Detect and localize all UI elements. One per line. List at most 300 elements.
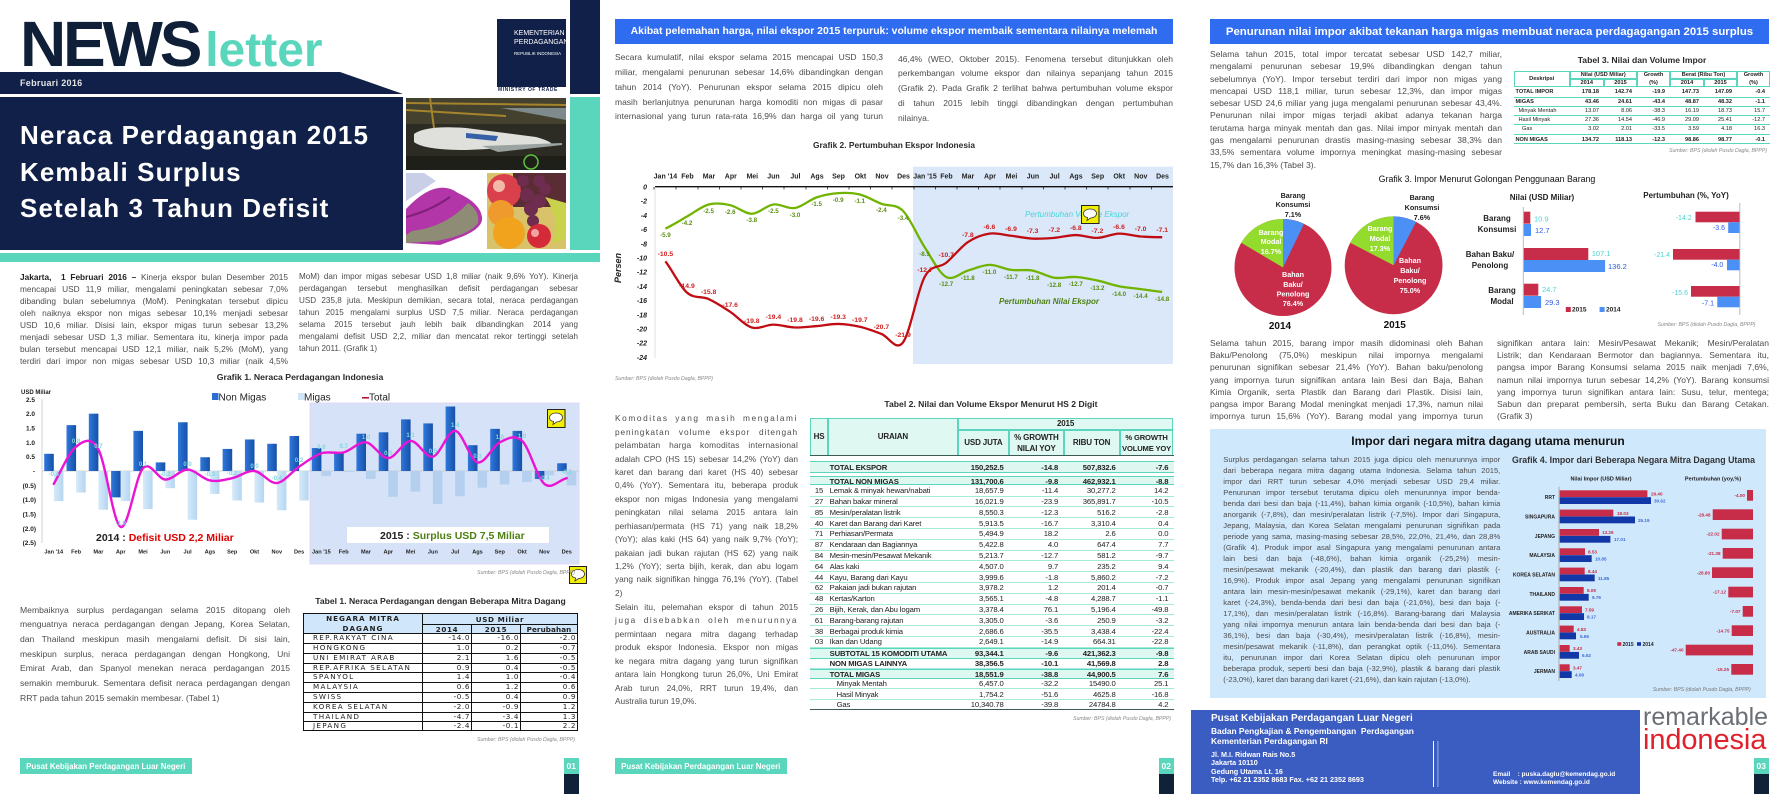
table: Tabel 3: 2015 [1714, 80, 1727, 86]
table: Tabel 3: 134.72 [1582, 137, 1599, 143]
table: Tabel 3: -43.4 [1652, 99, 1665, 105]
table: Tabel 2: -8.8 [1156, 477, 1168, 486]
publisher name: Pusat Kebijakan Perdagangan Luar Negeri [1211, 713, 1413, 724]
month labels: Mei [746, 174, 758, 180]
table: Tabel 2: 25.1 [1154, 679, 1168, 688]
table: Tabel 2: URAIAN [878, 432, 908, 441]
value labels red: -6.6 [1113, 224, 1125, 231]
table: Tabel 2: 1.2 [1048, 583, 1058, 592]
table: Tabel 3: -1.1 [1755, 99, 1765, 105]
month labels: Feb [940, 174, 953, 180]
table: Tabel 3: -0.4 [1755, 89, 1765, 95]
table: Tabel 2: Perhiasan/Permata [830, 529, 893, 538]
table: Tabel 3: 24.61 [1618, 99, 1632, 105]
table: Tabel 2: 3,310.4 [1091, 519, 1116, 528]
footer label page 1: Pusat Kebijakan Perdagangan Luar Negeri [26, 762, 185, 770]
bar chart: value: 29.3 [1545, 298, 1560, 307]
total data labels: 0.3 [473, 454, 482, 460]
month labels: Ags [205, 550, 215, 556]
growth values: -4.00 [1735, 493, 1745, 498]
y axis labels: -20 [637, 326, 647, 334]
text: commodity left column: Komoditas yang masih mengalami [615, 413, 798, 423]
y axis labels: -24 [637, 355, 647, 362]
table: Tabel 2: 462,932.1 [1083, 477, 1116, 486]
table: Tabel 1: 1.6 [506, 653, 519, 662]
pie chart 2014: 7.1% [1285, 210, 1302, 219]
country names [1509, 495, 1556, 675]
total data labels: 1.0 [362, 435, 371, 441]
text: import overview: sebesar USD 24,6 miliar yang juga mengalami penurunan sebesar 43,4%. [1210, 98, 1502, 108]
lead text right column: tahun 2015 mengalami surplus USD 7,5 miliar. Neraca perdagangan [299, 308, 578, 317]
table: Tabel 2: Alas kaki [830, 562, 859, 571]
brand logo: remarkable indonesia: remarkable [1643, 703, 1768, 731]
table: Tabel 3: MIGAS [1516, 99, 1534, 105]
bar chart: value: Nilai (USD Miliar) [1510, 193, 1575, 202]
ministry logo: PERDAGANGAN [514, 39, 567, 46]
country names: KOREA SELATAN [1513, 572, 1555, 578]
heading: Tabel 3: Tabel 3. Nilai dan Volume Impor [1578, 55, 1706, 65]
pie chart 2014: Barang [1259, 228, 1283, 237]
legend [212, 392, 390, 404]
table: Tabel 2: 507,832.6 [1083, 463, 1116, 472]
table: Tabel 2: 27 [815, 497, 823, 506]
text: export left column: Secara kumulatif, nilai ekspor selama 2015 mencapai USD 150,3 [615, 52, 883, 62]
table: Tabel 2: 4.2 [1158, 700, 1168, 709]
month labels: Jan '14 [654, 174, 677, 180]
growth values: -21.38 [1707, 551, 1721, 556]
value labels green: -11.0 [983, 269, 997, 276]
text: partner demand: ke negara mitra dagang yang turun signifikan [615, 656, 798, 666]
table: Tabel 2: 03 [815, 637, 823, 646]
month labels: Sep [1091, 174, 1104, 180]
text: import by use right column: namun nilai impornya turun sebesar 14,2% (YoY). Barang konsumsi [1497, 375, 1769, 385]
divider [1433, 741, 1434, 787]
text: export right column: 46,4% (WEO, Oktober 2015). Fenomena tersebut ditunjukkan oleh [898, 54, 1173, 64]
table: Tabel 2: % GROWTH [1014, 433, 1059, 442]
total data labels: -0.3 [160, 472, 171, 478]
text: export left column: tahun 2014 (YoY). Penurunan ekspor selama 2015 dipicu oleh [615, 82, 883, 92]
bar values: 4.83 [1577, 627, 1586, 632]
table: Tabel 2 [810, 418, 1174, 710]
chart: Grafik 4 imports by partner: 30.62 [1654, 498, 1666, 504]
value labels green: -4.2 [682, 220, 693, 227]
total data labels: -0.2 [227, 471, 238, 477]
table: Tabel 1: -0.9 [503, 702, 519, 711]
month labels: Jun [1027, 174, 1039, 180]
ministry logo: KEMENTERIAN [514, 30, 565, 37]
total data labels: 1.1 [406, 433, 415, 439]
table: Tabel 2: 40 [815, 519, 823, 528]
panel text: (-23,0%), karet dan barang dari karet (-21,6%), dan kain rajutan (-13,0%). [1223, 674, 1471, 684]
value labels red: -7.2 [1092, 228, 1103, 235]
table: Tabel 2: -9.8 [1156, 649, 1168, 658]
table: Tabel 3: 25.41 [1718, 117, 1732, 123]
table: Tabel 3: 29.09 [1685, 117, 1699, 123]
chart: Grafik 3 import by use [1234, 191, 1740, 332]
title panel: Kembali Surplus [20, 157, 242, 187]
table: Tabel 1: 1.4 [457, 672, 470, 681]
bar chart: value: 136.2 [1608, 262, 1627, 271]
table: Tabel 3: 178.18 [1582, 89, 1599, 95]
table: Tabel 3: Nilai (USD Miliar) [1581, 72, 1626, 78]
table: Tabel 2: 5,494.9 [979, 529, 1004, 538]
pie chart 2014: Baku/ [1283, 280, 1303, 289]
country names: MALAYSIA [1529, 553, 1555, 559]
lead text right column: tahun 2011. (Grafik 1) [299, 344, 377, 353]
chart: Grafik 4 imports by partner: 11.85 [1598, 576, 1610, 581]
value series green [665, 193, 1162, 292]
month labels: Des [294, 550, 304, 556]
table: Tabel 2: 4.0 [1048, 540, 1058, 549]
table: Tabel 3: 43.46 [1585, 99, 1599, 105]
heading: Tabel 1: Tabel 1. Neraca Perdagangan dengan Beberapa Mitra Dagang [315, 596, 566, 606]
month labels: Apr [984, 174, 996, 180]
table: Tabel 1: JEPANG [313, 721, 347, 730]
value labels red: -10.7 [938, 252, 954, 259]
icon: comment note [548, 410, 565, 428]
panel text: periode yang sama, masing-masing sebesar 28,5%, 22,0%, 21,4%, dan 28,8% [1223, 532, 1500, 540]
lead text left column: mencapai USD 11,9 miliar, mengalami peningkatan sebesar 7,0% [20, 284, 288, 294]
bar chart: value: 12.7 [1535, 226, 1550, 235]
table: Tabel 2: 3,999.6 [979, 573, 1004, 582]
month labels: Sep [832, 174, 845, 180]
heading: Grafik 3: Grafik 3. Impor Menurut Golongan Penggunaan Barang [1379, 174, 1595, 184]
country names: THAILAND [1529, 592, 1555, 598]
annotation 2015 surplus: 2015 : Surplus USD 7,5 Miliar [380, 530, 525, 542]
publisher unit: Badan Pengkajian & Pengembangan Perdagangan [1211, 726, 1414, 736]
text: surplus analysis: Emirat Arab, dan Spanyol menekan neraca perdagangan 2015 [20, 663, 290, 673]
y axis title: Persen [613, 252, 623, 283]
bar chart: value [1466, 193, 1627, 315]
bar values [1573, 492, 1663, 670]
table: Tabel 2: 48 [815, 594, 823, 603]
table: Tabel 2: 1,754.2 [979, 690, 1004, 699]
panel text: impor dari RRT turun sebesar 4,0% menjadi sebesar USD 29,4 miliar. [1223, 476, 1500, 486]
pie chart 2014: Konsumsi [1276, 200, 1310, 209]
table: Tabel 2: 131,700.6 [971, 477, 1004, 486]
table: Tabel 2: 365,891.7 [1083, 497, 1116, 506]
value labels red: -19.3 [830, 314, 846, 321]
month labels: Ags [810, 174, 824, 180]
text: import by use right column: Sabun dan preparat pembersih, serta Buku dan Barang Cetakan. [1497, 399, 1769, 409]
table: Tabel 2: 4,288.7 [1091, 594, 1116, 603]
table: Tabel 2: 5,422.8 [979, 540, 1004, 549]
value labels green: -0.9 [833, 197, 844, 204]
value labels green: -12.7 [939, 281, 954, 288]
country names: JERMAN [1534, 669, 1555, 675]
table: Tabel 2: Minyak Mentah [837, 679, 887, 688]
month labels: Apr [116, 550, 126, 556]
bar chart: value: Barang [1483, 214, 1511, 223]
bar values: 13.26 [1602, 530, 1614, 535]
heading: export section: Akibat pelemahan harga, nilai ekspor 2015 terpuruk: volume ekspor membaik sementara nilainya melemah [631, 26, 1157, 37]
table: Tabel 2: Berbagai produk kimia [830, 627, 903, 636]
y axis labels: (2.5) [23, 540, 36, 547]
text: import by use left column: penurunan signifikan sebesar 21,4% (YoY). Bahan baku/penolong [1210, 362, 1483, 372]
growth values: -14.75 [1716, 628, 1730, 633]
source note Grafik 1: Sumber: BPS (diolah Pusdo Dagla, BPPP) [477, 570, 575, 576]
total data labels: -0.2 [562, 470, 573, 476]
table: Tabel 1: -2.0 [454, 702, 470, 711]
text: export right column: nilainya. [898, 113, 929, 123]
table: Tabel 2: 250.9 [1097, 616, 1116, 625]
value labels red: -12.7 [917, 267, 933, 274]
photo: fresh fruit [487, 173, 566, 249]
table: Tabel 3: 147.73 [1682, 89, 1699, 95]
table: Tabel 1: -16.0 [497, 633, 519, 642]
value labels red [658, 224, 1168, 339]
table: Tabel 2: -11.4 [1042, 486, 1058, 495]
table: Tabel 3: Growth [1744, 72, 1763, 78]
total data labels: 1.0 [496, 435, 505, 441]
address [1211, 750, 1364, 784]
panel text: 17,1%), dan mesin/peralatan listrik (-16,8%). Barang-barang dari Malaysia [1223, 608, 1500, 618]
table: Tabel 2: 4,507.0 [979, 562, 1004, 571]
lead text left column: bulan tersebut mencapai USD 12,1 miliar, naik 5,2% (MoM), yang [20, 344, 288, 354]
text: commodity left column: adalah CPO (HS 15) sebesar 14,2% (YoY) dan [615, 454, 798, 464]
value labels red: -20.7 [874, 324, 889, 331]
ministry logo [497, 19, 567, 93]
chart: Grafik 4 imports by partner: 6.52 [1582, 653, 1591, 658]
table: Tabel 2: -35.5 [1041, 627, 1058, 636]
text: import overview: mengalami penurunan sebesar 19,9% dibandingkan dengan tahun [1210, 61, 1502, 71]
table: Tabel 2: TOTAL NON MIGAS [830, 477, 899, 486]
table: Tabel 1: -3.4 [503, 712, 519, 721]
table: Tabel 3: 13.07 [1585, 108, 1599, 114]
panel text: Surplus perdagangan selama tahun 2015 juga dipicu oleh menurunnya impor [1223, 454, 1500, 464]
text: partner demand: Australia turun 19,0%. [615, 696, 697, 706]
bar chart: growth: -4.0 [1711, 262, 1723, 269]
month labels: Mar [962, 174, 974, 180]
month labels: Sep [495, 550, 506, 556]
panel text: mesin/pesawat mekanik (-20,4%), dan plastik dan barang dari plastik (- [1223, 564, 1500, 574]
table: Tabel 2: Kertas/Karton [830, 594, 875, 603]
table: Tabel 1: -2.4 [454, 721, 470, 730]
right stripe teal [570, 97, 600, 250]
table: Tabel 2: -10.1 [1041, 659, 1058, 668]
table: Tabel 1: -0.5 [560, 663, 576, 672]
table: Tabel 1: 2014 [436, 625, 458, 634]
total data labels: -0.4 [49, 472, 60, 478]
month labels: Okt [1113, 174, 1126, 180]
table: Tabel 3: TOTAL IMPOR [1516, 89, 1553, 95]
month labels: Jul [184, 550, 192, 556]
month labels: Des [562, 550, 572, 556]
growth values [1670, 493, 1745, 672]
panel text: Jepang, Malaysia, dan Korea Selatan mengalami penurunan signifikan pada [1223, 520, 1500, 530]
table: Tabel 3: -33.5 [1652, 126, 1665, 132]
y axis labels: -6 [641, 227, 647, 234]
country names: SINGAPURA [1525, 514, 1555, 520]
month labels [44, 550, 572, 556]
text: commodity left column: (YoY); alas kaki (HS 64) yang naik 9,7% (YoY); [615, 534, 798, 544]
table: Tabel 2: 664.31 [1093, 637, 1116, 646]
table: Tabel 3: 2014 [1681, 80, 1693, 86]
table: Tabel 2: 2.6 [1105, 529, 1116, 538]
pie chart 2015: Bahan [1399, 256, 1421, 265]
y axis labels: 0 [643, 184, 647, 192]
value labels red: -17.6 [722, 302, 738, 309]
country names: RRT [1545, 495, 1555, 501]
table: Tabel 2: -4.8 [1045, 594, 1058, 603]
table: Tabel 2: 85 [815, 508, 823, 517]
table: Tabel 2: 44,900.5 [1087, 670, 1116, 679]
table: Tabel 1: 0.2 [506, 643, 519, 652]
text: import by use right column [1497, 338, 1769, 421]
table: Tabel 3: Deskripsi [1529, 76, 1554, 82]
pie chart 2015: 2015 [1384, 320, 1406, 331]
source note Tabel 1: Sumber: BPS (diolah Pusdo Dagla, BPPP) [477, 736, 575, 742]
non migas bars [44, 406, 567, 497]
value labels red: -19.6 [809, 316, 825, 323]
bar chart: growth: -21.4 [1654, 252, 1670, 259]
table: Tabel 2: 2,649.1 [979, 637, 1004, 646]
value labels green: -8.5 [919, 251, 930, 258]
pie chart 2015: 7.6% [1414, 213, 1431, 222]
text: commodity left column: ekspor non migas Indonesia yang mengalami [615, 494, 798, 504]
text: import overview: 33,5% sementara volume impornya meningkat masing-masing sebesar [1210, 147, 1502, 157]
text: commodity left column: perhiasan/permata (HS 71) yang naik 18,2% [615, 521, 798, 531]
panel text: yang nilai impornya menurun antara lain benda-benda dari besi dan baja (- [1223, 620, 1500, 628]
table: Tabel 2: 2,686.6 [979, 627, 1004, 636]
heading: Grafik 2: Grafik 2. Pertumbuhan Ekspor Indonesia [813, 140, 975, 150]
growth values: -28.80 [1697, 570, 1710, 575]
footer label page 2: Pusat Kebijakan Perdagangan Luar Negeri [621, 762, 780, 770]
y axis labels: 2.0 [26, 411, 35, 418]
text: export right column [898, 54, 1173, 123]
value labels red: -7.8 [962, 232, 974, 239]
2015 shaded panel [913, 167, 1173, 364]
month labels: Ags [1069, 174, 1083, 180]
table: Tabel 3: 118.13 [1615, 137, 1632, 143]
text: export left column: masih berlanjutnya penurunan harga komoditi non migas di pasar [615, 97, 883, 107]
chart: Grafik 1 trade balance [21, 390, 580, 564]
text: surplus analysis: semakin memburuk. Sementara defisit neraca perdagangan dengan [20, 678, 290, 688]
table: Tabel 1: -14.0 [448, 633, 470, 642]
table: Tabel 2: 93,344.1 [975, 649, 1004, 658]
total data labels: -0.4 [539, 476, 550, 482]
table: Tabel 2: 62 [815, 583, 823, 592]
pie chart 2014: Bahan [1282, 270, 1304, 279]
table: Tabel 1: 1.0 [457, 643, 470, 652]
value labels red: -19.8 [787, 317, 803, 324]
month labels: Apr [383, 550, 394, 556]
month labels: Mar [703, 174, 715, 180]
bar chart: value: 2014 [1606, 307, 1621, 314]
pie chart 2015 [1345, 193, 1442, 331]
bar chart: growth: -3.6 [1713, 225, 1725, 232]
panel text: antara lain mesin-mesin/pesawat mekanik (-29,1%), karet dan barang dari [1223, 586, 1500, 596]
y axis labels: -2 [641, 199, 647, 206]
table: Tabel 2: Kendaraan dan Bagiannya [830, 540, 917, 549]
table: Tabel 2: RIBU TON [1073, 438, 1110, 447]
text: import overview: terutama harga minyak mentah dan gas. Nilai impor minyak mentah dan [1210, 123, 1502, 133]
table: Tabel 3: 98.86 [1685, 137, 1699, 143]
table: Tabel 2: 235.2 [1097, 562, 1116, 571]
heading: Grafik 1: Grafik 1. Neraca Perdagangan Indonesia [217, 372, 383, 382]
table: Tabel 3: 3.59 [1688, 126, 1699, 132]
value labels red: -6.9 [1005, 226, 1017, 233]
month labels: Feb [681, 174, 694, 180]
panel: imports from trade partners [1210, 429, 1766, 698]
bar chart: growth: Pertumbuhan (%, YoY) [1643, 191, 1729, 200]
country names: ARAB SAUDI [1524, 650, 1556, 656]
table: Tabel 3: 27.36 [1585, 117, 1599, 123]
axis lines [42, 399, 579, 543]
value labels red: -19.8 [744, 318, 760, 325]
table: Tabel 2: -0.7 [1156, 583, 1168, 592]
month labels: Okt [517, 550, 527, 556]
legend: Total [369, 392, 390, 404]
table: Tabel 2: Barang-barang rajutan [830, 616, 903, 625]
value labels red: -10.5 [658, 251, 673, 258]
total data labels: -0.3 [205, 472, 216, 478]
table: Tabel 2: 38 [815, 627, 823, 636]
text: import by use right column: Listrik; dan Kendaraan Bermotor dan bagiannya. Sementara itu, [1497, 350, 1769, 360]
pie chart 2015: Baku/ [1400, 266, 1420, 275]
source note Tabel 2: Sumber: BPS (diolah Pusdo Dagla, BPPP) [1073, 716, 1171, 722]
masthead title: NEWSletter: NEWSletter [20, 8, 323, 80]
table: Tabel 2: -10.5 [1152, 497, 1168, 506]
table: Tabel 2: 3,565.1 [979, 594, 1004, 603]
y axis labels: 1.5 [26, 426, 35, 432]
address: Telp. +62 21 2352 8683 Fax. +62 21 2352 8693 [1211, 775, 1364, 784]
text: partner demand: juga disebabkan oleh menurunnya [615, 615, 798, 625]
table: Tabel 1: -2.0 [560, 633, 576, 642]
table: Tabel 2: 421,362.3 [1083, 649, 1116, 658]
table: Tabel 1: 0.6 [457, 682, 470, 691]
pie chart 2014: 16.7% [1261, 247, 1282, 256]
value labels red: -19.7 [852, 317, 868, 324]
total line [54, 431, 567, 527]
month labels: Nov [1134, 174, 1148, 180]
value labels green: -3.8 [746, 217, 758, 224]
month labels: Nov [875, 174, 889, 180]
table: Tabel 2: 6,457.0 [979, 679, 1004, 688]
heading: Tabel 2: Tabel 2. Nilai dan Volume Ekspor Menurut HS 2 Digit [884, 399, 1098, 409]
text: export left column: miliar, mengalami penurunan sebesar 14,6% dibandingkan dengan [615, 67, 883, 77]
table: Tabel 2: 24784.8 [1089, 700, 1116, 709]
table: Tabel 2: -9.8 [1045, 477, 1058, 486]
table: Tabel 3: Berat (Ribu Ton) [1682, 72, 1725, 78]
date band: Februari 2016 [20, 78, 82, 88]
table: Tabel 2: 44 [815, 573, 823, 582]
bar values: 8.44 [1588, 569, 1597, 574]
value labels green: -3.0 [790, 212, 801, 219]
growth values: -28.48 [1697, 512, 1711, 517]
month labels: Jun [160, 550, 171, 556]
page number 03: 03 [1757, 761, 1766, 771]
panel text: (Grafik 4). Produk impor asal Singapura yang mengalami penurunan antara [1223, 542, 1500, 552]
table: Tabel 2: 201.4 [1097, 583, 1116, 592]
bar values: 18.03 [1617, 511, 1629, 516]
table: Tabel 1: THAILAND [313, 712, 360, 721]
text: commodity left column: peningkatan volume ekspor ditengah [615, 427, 798, 437]
y axis labels: 2.5 [26, 397, 35, 404]
table: Tabel 2: -14.9 [1041, 637, 1058, 646]
text: partner demand: permintaan negara mitra dagang terhadap [615, 629, 798, 639]
month labels: Des [897, 174, 910, 180]
right stripe navy [570, 0, 600, 94]
text: import overview: 15,7% dan 16,3% (Tabel 3). [1210, 160, 1316, 170]
value labels green: -2.6 [725, 209, 736, 216]
month labels: Mar [93, 550, 104, 556]
y axis labels: -22 [637, 341, 647, 348]
publisher unit: Kementerian Perdagangan RI [1211, 736, 1328, 746]
bar chart: value: 2015 [1572, 307, 1587, 314]
table: Tabel 2: 5,213.7 [979, 551, 1004, 560]
legend: 2014 [1642, 642, 1654, 648]
